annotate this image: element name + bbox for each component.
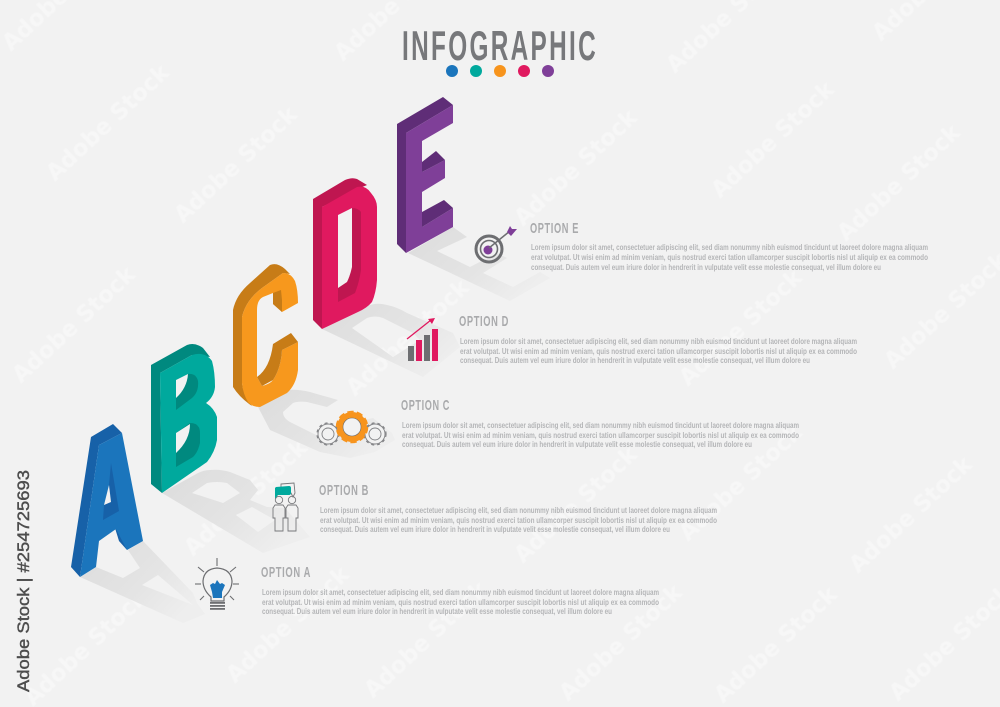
option A text block: consequat. Duis autem vel eum iriure dolor in hendrerit in vulputate velit esse molestie consequat, vel illum dolore eu bbox=[262, 607, 612, 616]
option C text block: Lorem ipsum dolor sit amet, consectetuer adipiscing elit, sed diam nonummy nibh euismod tincidunt ut laoreet dolore magna aliquam bbox=[402, 421, 799, 430]
letter A bbox=[71, 424, 143, 577]
icon: two people with speech bubbles bbox=[273, 483, 298, 531]
option E text block bbox=[530, 220, 928, 272]
icon: target with arrow bbox=[476, 226, 517, 262]
option C text block: OPTION C bbox=[401, 397, 450, 414]
option A text block bbox=[261, 564, 659, 616]
option B text block: consequat. Duis autem vel eum iriure dolor in hendrerit in vulputate velit esse molestie consequat, vel illum dolore eu bbox=[320, 525, 670, 534]
letter E bbox=[397, 97, 453, 253]
letter C bbox=[233, 264, 298, 407]
icon: bar chart with arrow bbox=[407, 318, 438, 361]
option D text block bbox=[459, 313, 857, 365]
option E text block: OPTION E bbox=[530, 220, 579, 237]
option C text block bbox=[401, 397, 799, 449]
colour dots bbox=[446, 65, 554, 77]
option A text block: Lorem ipsum dolor sit amet, consectetuer adipiscing elit, sed diam nonummy nibh euismod tincidunt ut laoreet dolore magna aliquam bbox=[262, 588, 659, 597]
watermark pattern: Adobe Stock bbox=[832, 119, 966, 246]
watermark pattern: Adobe Stock bbox=[706, 76, 840, 203]
option A text block: OPTION A bbox=[261, 564, 311, 581]
option B text block: Lorem ipsum dolor sit amet, consectetuer adipiscing elit, sed diam nonummy nibh euismod tincidunt ut laoreet dolore magna aliquam bbox=[320, 506, 717, 515]
letter D bbox=[313, 178, 377, 329]
watermark pattern: Adobe Stock bbox=[179, 434, 313, 561]
watermark pattern: Adobe Stock bbox=[554, 579, 688, 706]
icon: light bulb bbox=[195, 558, 239, 610]
option D text block: consequat. Duis autem vel eum iriure dolor in hendrerit in vulputate velit esse molestie consequat, vel illum dolore eu bbox=[460, 356, 810, 365]
option D text block: OPTION D bbox=[459, 313, 509, 330]
watermark pattern: Adobe Stock bbox=[844, 451, 978, 578]
watermark pattern: Adobe Stock bbox=[674, 419, 808, 546]
shadow: letter B bbox=[162, 470, 310, 553]
watermark pattern: Adobe Stock bbox=[169, 101, 303, 228]
letter B bbox=[151, 344, 217, 493]
option E text block: consequat. Duis autem vel eum iriure dolor in hendrerit in vulputate velit esse molestie consequat, vel illum dolore eu bbox=[531, 263, 881, 272]
watermark pattern: Adobe Stock bbox=[709, 581, 843, 707]
option C text block: erat volutpat. Ut wisi enim ad minim veniam, quis nostrud exerci tation ullamcorper suscipit lobortis nisl ut aliquip ex ea commodo bbox=[402, 431, 799, 440]
shadow: letter A bbox=[80, 541, 205, 623]
shadow: letter E bbox=[408, 227, 550, 301]
option A text block: erat volutpat. Ut wisi enim ad minim veniam, quis nostrud exerci tation ullamcorper suscipit lobortis nisl ut aliquip ex ea commodo bbox=[262, 598, 659, 607]
title: INFOGRAPHIC bbox=[402, 22, 598, 69]
icon: gears bbox=[317, 412, 386, 445]
watermark pattern: Adobe Stock bbox=[221, 561, 355, 688]
watermark pattern: Adobe Stock bbox=[674, 264, 808, 391]
shadow: letter C bbox=[258, 390, 395, 458]
option B text block bbox=[319, 482, 717, 534]
option D text block: erat volutpat. Ut wisi enim ad minim veniam, quis nostrud exerci tation ullamcorper suscipit lobortis nisl ut aliquip ex ea commodo bbox=[460, 347, 857, 356]
stock id label: Adobe Stock | #254725693 bbox=[15, 470, 33, 692]
watermark pattern: Adobe Stock bbox=[341, 274, 475, 401]
watermark pattern: Adobe Stock bbox=[7, 261, 141, 388]
option C text block: consequat. Duis autem vel eum iriure dolor in hendrerit in vulputate velit esse molestie consequat, vel illum dolore eu bbox=[402, 440, 752, 449]
option B text block: OPTION B bbox=[319, 482, 369, 499]
option D text block: Lorem ipsum dolor sit amet, consectetuer adipiscing elit, sed diam nonummy nibh euismod tincidunt ut laoreet dolore magna aliquam bbox=[460, 337, 857, 346]
shadow: letter D bbox=[322, 304, 460, 377]
watermark pattern: Adobe Stock bbox=[509, 104, 643, 231]
watermark pattern: Adobe Stock bbox=[509, 441, 643, 568]
option B text block: erat volutpat. Ut wisi enim ad minim veniam, quis nostrud exerci tation ullamcorper suscipit lobortis nisl ut aliquip ex ea commodo bbox=[320, 516, 717, 525]
watermark pattern: Adobe Stock bbox=[359, 576, 493, 703]
watermark pattern: Adobe Stock bbox=[41, 59, 175, 186]
